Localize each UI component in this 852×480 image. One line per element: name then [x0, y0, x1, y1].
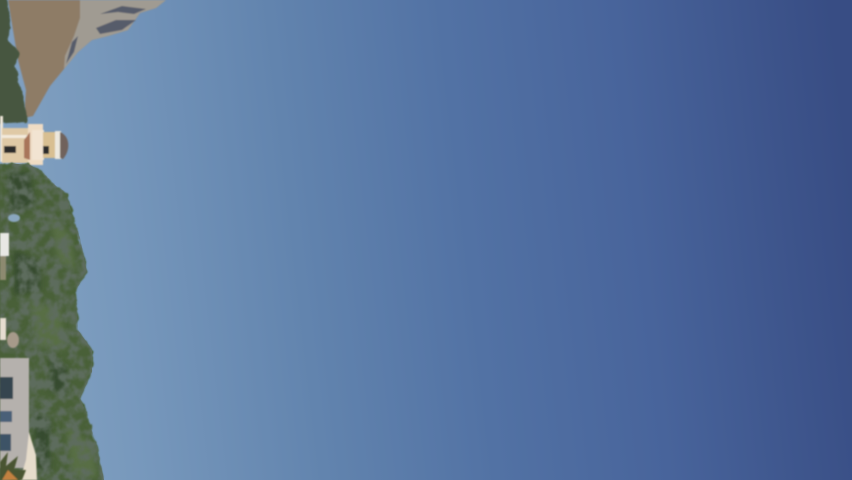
- hillside with rock face: [8, 0, 166, 118]
- grey building with windows: [0, 358, 37, 480]
- tower: [0, 116, 68, 165]
- small white structures: [0, 233, 19, 348]
- palm plant in the corner: [0, 452, 26, 480]
- trees along the upper left edge: [0, 0, 27, 124]
- tree line along the lower left edge: [0, 160, 110, 480]
